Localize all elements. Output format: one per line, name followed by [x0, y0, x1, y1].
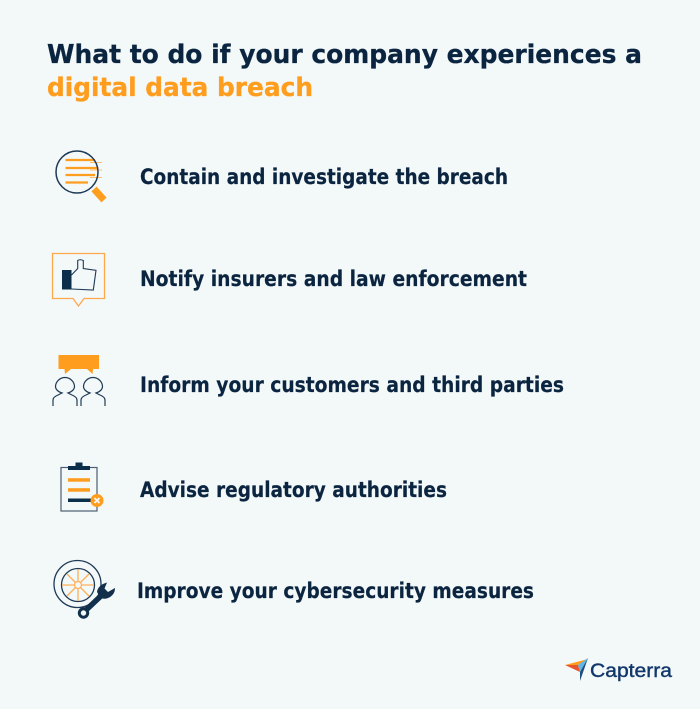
step 5 text: Improve your cybersecurity measures: [137, 579, 534, 603]
logo: Capterra: Capterra: [590, 661, 672, 682]
step 1 text: Contain and investigate the breach: [140, 165, 508, 189]
title: [47, 40, 642, 103]
icon: clipboard: [61, 462, 104, 511]
title: digital data breach: [47, 73, 313, 103]
icon: magnifying glass: [56, 151, 104, 200]
icon: wheel and wrench: [54, 560, 115, 617]
logo: Capterra: [565, 658, 672, 682]
title: What to do if your company experiences a: [47, 40, 642, 70]
step 2 text: Notify insurers and law enforcement: [140, 267, 527, 291]
icon: two people with speech bubble: [53, 355, 105, 406]
step 4 text: Advise regulatory authorities: [140, 478, 447, 502]
step 3 text: Inform your customers and third parties: [140, 373, 564, 397]
icon: thumbs up: [52, 254, 104, 306]
